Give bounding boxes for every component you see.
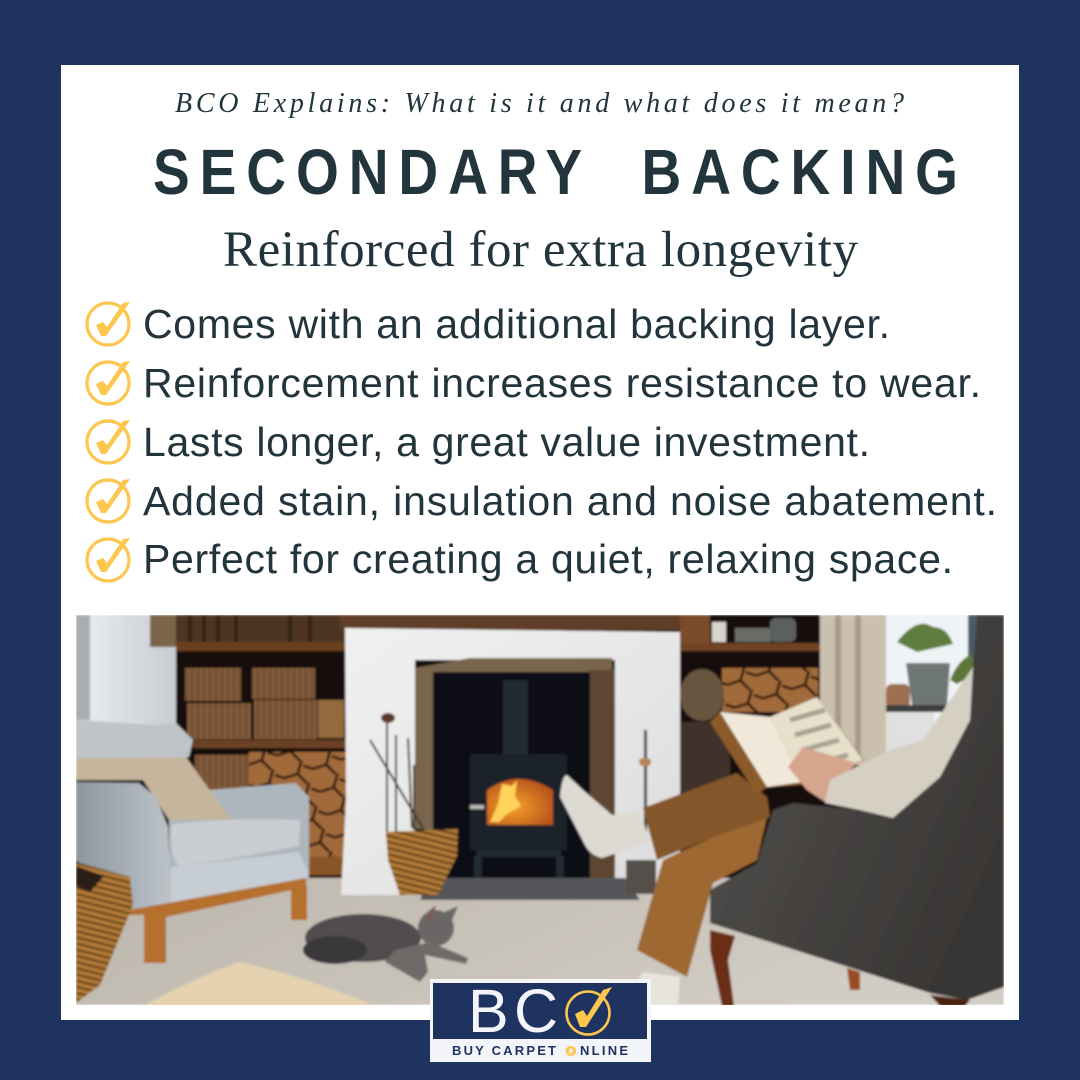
logo: BCO Buy Carpet Online: O xyxy=(565,1043,577,1060)
logo: BCO Buy Carpet Online xyxy=(430,977,651,1062)
subtitle: Reinforced for extra longevity xyxy=(223,222,858,278)
curtain xyxy=(820,615,886,765)
floor xyxy=(76,878,1004,1005)
list item 5: Perfect for creating a quiet, relaxing space. xyxy=(143,536,953,582)
dried stems xyxy=(370,718,430,840)
grey wing chair xyxy=(710,615,1004,1006)
reader's hand xyxy=(788,747,857,803)
title: SECONDARY BACKING xyxy=(153,136,958,208)
list item 3: Lasts longer, a great value investment. xyxy=(143,419,870,465)
photo: cosy living room with fireplace xyxy=(76,615,1004,1006)
window and plant xyxy=(884,615,978,753)
fire irons xyxy=(626,730,656,894)
logo: BCO Buy Carpet Online: BUY CARPET xyxy=(452,1043,556,1058)
left armchair xyxy=(76,720,309,963)
wall xyxy=(78,615,178,726)
list item 2: Reinforcement increases resistance to wear. xyxy=(143,360,981,406)
fireplace surround xyxy=(340,615,712,895)
logo: BCO Buy Carpet Online: BC xyxy=(468,977,558,1045)
checklist xyxy=(87,301,997,582)
logo: BCO Buy Carpet Online: NLINE xyxy=(580,1043,628,1058)
hearth xyxy=(420,878,640,900)
white panel xyxy=(61,65,1019,1020)
right alcove xyxy=(680,615,820,792)
cat xyxy=(303,905,468,982)
reader's lower leg and foot xyxy=(560,773,770,1006)
fireside basket xyxy=(386,829,458,895)
wood stove and fire xyxy=(470,680,567,878)
open book xyxy=(710,697,864,795)
sheepskin rug xyxy=(143,962,376,1006)
list item 1: Comes with an additional backing layer. xyxy=(143,301,890,347)
list item 4: Added stain, insulation and noise abatement. xyxy=(143,478,997,524)
left shelves and baskets xyxy=(150,615,346,877)
wicker basket xyxy=(76,862,133,1003)
knitted sleeve xyxy=(825,667,973,818)
eyebrow heading: BCO Explains: What is it and what does it mean? xyxy=(175,88,904,119)
